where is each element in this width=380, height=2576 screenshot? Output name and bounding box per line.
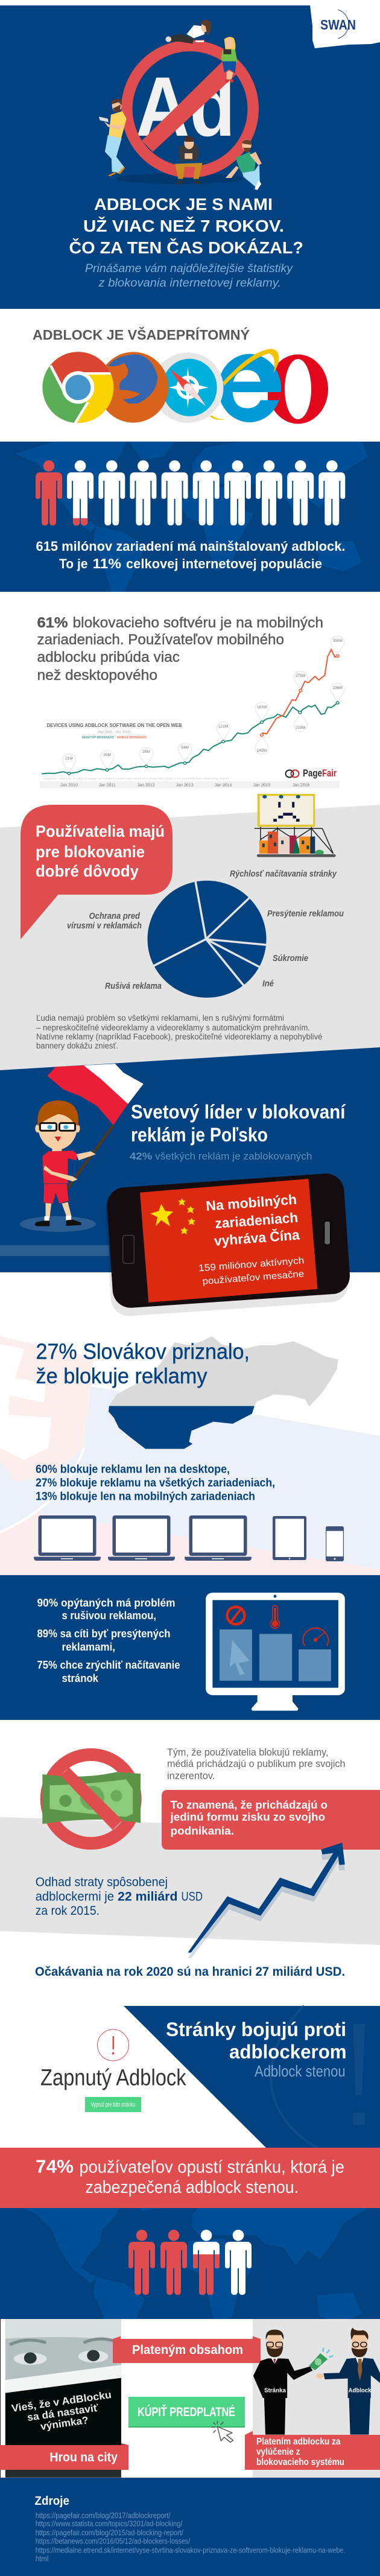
SWAN logo on torn paper: SWAN xyxy=(320,17,356,33)
label: paying adblock: Platením adblocku za xyxy=(256,2437,341,2447)
illustration: paying businessmen xyxy=(253,2327,380,2435)
panel: Poland xyxy=(0,1047,380,1272)
pin labels: 145M xyxy=(257,749,267,753)
walls subheading: Adblock stenou xyxy=(255,2062,346,2080)
billboard with sad face xyxy=(255,794,335,857)
label: paid content: Plateným obsahom xyxy=(132,2343,243,2357)
Slovakia heading: 27% Slovákov priznalo, xyxy=(36,1339,250,1364)
text: estimated loss: 22 miliárd xyxy=(118,1890,177,1904)
text: estimated loss: za rok 2015. xyxy=(36,1904,100,1918)
pie labels: Iné xyxy=(262,979,274,989)
callout: lost revenue: podnikania. xyxy=(170,1825,234,1837)
icon: gauge xyxy=(303,1628,328,1646)
Poland statistic: 42% xyxy=(130,1151,153,1162)
icon: laptop xyxy=(34,1515,101,1561)
device shares xyxy=(36,1464,275,1503)
speech bubble heading: dobré dôvody xyxy=(36,862,139,880)
chart legend: MOBILE BROWSERS xyxy=(117,736,147,740)
text: estimated loss: Odhad straty spôsobenej xyxy=(36,1876,168,1889)
band: 74 percent leave: používateľov opustí stránku, ktorá je xyxy=(79,2158,344,2177)
axis labels: Jan 2013 xyxy=(176,783,194,788)
label: paying adblock: blokovacieho systému xyxy=(256,2457,344,2467)
annoyance statistics: 75% chce zrýchliť načítavanie xyxy=(37,1659,180,1671)
lying woman xyxy=(165,20,211,43)
chart footnote: PageFair's estimate of adblock usage on mobile browsers was updated in November 2016 in its revised Mobile Adblocking Report xyxy=(43,777,229,780)
phone text xyxy=(198,1191,305,1287)
icon: opera xyxy=(268,355,328,424)
label: emotional appeal xyxy=(0,2443,128,2470)
panel: annoyance xyxy=(0,1575,380,1720)
walls heading xyxy=(166,2019,347,2063)
pin labels: 236M xyxy=(333,686,343,690)
phone: China statistic xyxy=(104,1172,351,1317)
man with yellow shirt xyxy=(99,99,127,176)
hero panel xyxy=(0,5,380,309)
phone text: vyhráva Čína xyxy=(214,1226,300,1249)
device shares: 27% blokuje reklamu na všetkých zariadeniach, xyxy=(36,1477,275,1489)
panel: adblock population xyxy=(0,442,380,592)
PageFair logo: Fair xyxy=(322,767,337,779)
seated man with phone xyxy=(175,136,203,185)
text: estimated loss: USD xyxy=(181,1890,203,1904)
icon: warning circle xyxy=(98,2029,129,2061)
icon: thermometer xyxy=(271,1606,280,1628)
pin labels xyxy=(65,639,343,761)
line chart xyxy=(40,636,344,788)
icon: banknote crossed out xyxy=(42,1754,141,1844)
sources list: https://pagefair.com/blog/2017/adblockreport/ xyxy=(36,2511,171,2520)
annoyance statistics: 90% opýtaných má problém xyxy=(37,1597,175,1609)
people pictogram xyxy=(36,460,345,525)
axis labels: Jan 2015 xyxy=(253,783,271,788)
text: mobile share: adblocku pribúda viac xyxy=(37,649,180,665)
pin labels: 275M xyxy=(296,674,305,678)
browser logos xyxy=(42,349,328,425)
icon: cursor click xyxy=(211,2421,233,2442)
text: mobile share: než desktopového xyxy=(37,667,157,684)
icon: tablet xyxy=(273,1516,306,1560)
text: estimated loss xyxy=(36,1876,203,1918)
text: mobile share: zariadeniach. Používateľov mobilného xyxy=(37,632,284,648)
desktop line xyxy=(42,703,338,774)
title: ČO ZA TEN ČAS DOKÁZAL? xyxy=(69,238,303,257)
panel: sources xyxy=(0,2478,380,2576)
boy with Polish flag xyxy=(34,1064,144,1226)
population text: celkovej internetovej populácie xyxy=(126,556,322,571)
sitting man in green shirt xyxy=(226,139,262,190)
phone text: zariadeniach xyxy=(214,1210,299,1231)
axis labels: Jan 2016 xyxy=(293,783,310,788)
button: disable adblock xyxy=(85,2097,141,2112)
pin labels: 121M xyxy=(218,725,228,729)
text: estimated loss: adblockermi je xyxy=(36,1890,114,1904)
title xyxy=(69,195,303,257)
paragraph: reasons: Natívne reklamy (napríklad Facebook), preskočiteľné videoreklamy a nepohyblivé xyxy=(36,1032,322,1041)
axis band xyxy=(40,781,339,788)
chart legend: DESKTOP BROWSERS xyxy=(82,736,114,740)
annoyance statistics: reklamami, xyxy=(62,1641,115,1653)
phone text: 159 miliónov aktívnych xyxy=(198,1255,305,1274)
annoyance statistics: stránok xyxy=(62,1672,99,1684)
speech bubble heading xyxy=(21,805,173,939)
icon: prohibited xyxy=(227,1607,244,1624)
chart title: DEVICES USING ADBLOCK SOFTWARE ON THE OPEN WEB xyxy=(47,722,182,728)
arrow: rising loss xyxy=(188,1842,345,1958)
axis labels: Jan 2014 xyxy=(215,783,232,788)
PageFair logo xyxy=(286,767,337,779)
paragraph: reasons: bannery dokážu zniesť. xyxy=(36,1041,118,1050)
button: disable adblock: Vypnúť pre túto stránku xyxy=(91,2101,135,2108)
population text: To je xyxy=(59,556,88,571)
pie chart xyxy=(147,875,271,998)
axis labels: Jan 2010 xyxy=(60,783,78,788)
icon: laptop xyxy=(108,1515,175,1561)
subtitle: z blokovania internetovej reklamy. xyxy=(98,277,281,290)
Poland heading: Svetový líder v blokovaní xyxy=(131,1101,346,1123)
paragraph: reasons: – nepreskočiteľné videoreklamy a videoreklamy s automatickým prehrávaním. xyxy=(36,1023,310,1032)
text: mobile share: 61% xyxy=(37,615,68,631)
pie labels: Presýtenie reklamou xyxy=(267,909,344,919)
pin labels: 390M xyxy=(333,639,343,643)
speech bubble heading: Používatelia majú xyxy=(36,822,165,840)
text: lost audience xyxy=(167,1746,345,1781)
panel: ways to fight xyxy=(0,2319,380,2481)
icon: internet explorer xyxy=(210,349,282,422)
pie labels: Rýchlosť načítavania stránky xyxy=(230,869,337,879)
panel: reasons xyxy=(0,794,380,1070)
pin labels: 54M xyxy=(181,746,189,750)
Slovakia heading: že blokuje reklamy xyxy=(36,1363,207,1388)
axis labels: Jan 2012 xyxy=(138,783,155,788)
callout: lost revenue xyxy=(162,1790,380,1850)
icon: chrome xyxy=(42,352,115,425)
book text: sa dá nastaviť xyxy=(27,2402,100,2423)
annoyance statistics: s rušivou reklamou, xyxy=(62,1610,156,1622)
panel: revenue loss xyxy=(0,1746,380,1979)
walls heading: Stránky bojujú proti xyxy=(166,2019,346,2040)
label: emotional appeal: Hrou na city xyxy=(49,2451,118,2464)
illustration: ad prohibition sign with people: Ad xyxy=(136,59,235,154)
label: paying adblock xyxy=(245,2431,380,2470)
pin labels: 216M xyxy=(296,726,305,730)
monitor with bars xyxy=(206,1593,345,1711)
sources list: https://www.statista.com/topics/3201/ad-blocking/ xyxy=(36,2519,183,2528)
text: 2020 expectation: Očakávania na rok 2020 sú na hranici 27 miliárd USD. xyxy=(35,1965,345,1979)
population text: 11% xyxy=(93,556,121,571)
pie labels: Súkromie xyxy=(273,954,308,963)
paragraph: reasons xyxy=(36,1014,322,1050)
sources heading: Zdroje xyxy=(35,2495,69,2508)
icon: cursor xyxy=(230,1640,250,1675)
population text: 615 milónov zariadení má nainštalovaný adblock. xyxy=(36,539,345,554)
annoyance statistics xyxy=(37,1597,180,1684)
band: 74 percent leave: 74% xyxy=(36,2156,74,2177)
sources list: https://pagefair.com/blog/2015/ad-blocking-report/ xyxy=(36,2528,183,2537)
illustration: ad prohibition sign with people xyxy=(99,20,262,190)
panel: Slovakia xyxy=(0,1336,380,1575)
sources list xyxy=(36,2511,345,2563)
annoyance statistics: 89% sa cíti byť presýtených xyxy=(37,1628,170,1640)
man: site xyxy=(253,2330,312,2435)
axis labels xyxy=(60,783,310,788)
book text: výnimka? xyxy=(40,2414,89,2432)
text: mobile share xyxy=(37,615,323,684)
subtitle xyxy=(85,262,294,290)
icon: firefox xyxy=(98,352,168,423)
title: UŽ VIAC NEŽ 7 ROKOV. xyxy=(83,217,284,235)
Slovakia heading xyxy=(36,1339,250,1388)
band: 74 percent leave: zabezpečená adblock stenou. xyxy=(86,2178,299,2197)
panel: adblock walls xyxy=(40,2006,380,2148)
pie labels: Ochrana pred xyxy=(89,912,141,921)
chart subtitle: (Apr 2009 - Dec 2016) xyxy=(98,731,131,734)
text: lost audience: inzerentov. xyxy=(167,1770,215,1781)
SWAN logo on torn paper xyxy=(310,5,380,48)
icon: Chinese flag stars xyxy=(150,1198,195,1234)
icon: phone xyxy=(326,1526,344,1561)
band: 74 percent leave xyxy=(0,2148,380,2208)
map of Slovakia xyxy=(109,1336,338,1449)
walls heading: adblockerom xyxy=(229,2041,347,2063)
callout: lost revenue: jedinú formu zisku zo svojho xyxy=(169,1811,325,1823)
heading: adblock everywhere: ADBLOCK JE VŠADEPRÍTOMNÝ xyxy=(33,326,250,343)
icon: safari xyxy=(152,352,223,423)
pin labels: 35M xyxy=(142,750,150,754)
sources list: html xyxy=(36,2554,48,2563)
text: lost audience: médiá prichádzajú o publikum pre svojich xyxy=(167,1758,345,1769)
book text: Vieš, že v AdBlocku xyxy=(11,2389,112,2414)
Poland statistic: všetkých reklám je zablokovaných xyxy=(155,1151,312,1162)
label: paid content xyxy=(113,2336,261,2363)
mobile line xyxy=(262,650,338,735)
label: paying adblock: vylúčenie z xyxy=(256,2447,300,2457)
pin labels: 30M xyxy=(103,753,111,757)
Poland heading: reklám je Poľsko xyxy=(131,1124,268,1146)
phone text: používateľov mesačne xyxy=(202,1269,305,1287)
button: buy subscription xyxy=(128,2397,245,2428)
paragraph: reasons: Ľudia nemajú problém so všetkými reklamami, len s rušivými formátmi xyxy=(36,1014,284,1023)
label: adblock: Adblock xyxy=(349,2387,372,2394)
callout: lost revenue: To znamená, že prichádzajú o xyxy=(170,1799,328,1811)
pie labels xyxy=(67,869,344,991)
subtitle: Prinášame vám najdôležitejšie štatistiky xyxy=(85,262,294,275)
phone text: Na mobilných xyxy=(205,1191,297,1214)
axis labels: Jan 2011 xyxy=(98,783,116,788)
book text xyxy=(11,2389,112,2432)
pie labels: Rušivá reklama xyxy=(105,982,162,991)
label: site: Stránka xyxy=(264,2387,286,2394)
text: lost audience: Tým, že používatelia blokujú reklamy, xyxy=(167,1746,328,1758)
devices icons xyxy=(34,1515,344,1561)
sources list: https://betanews.com/2016/05/12/ad-blockers-losses/ xyxy=(36,2537,191,2546)
icon: laptop xyxy=(185,1515,252,1561)
man: adblock xyxy=(316,2327,380,2435)
chart legend xyxy=(82,736,147,740)
blonde woman with tablet xyxy=(221,37,238,83)
icon: money xyxy=(309,2348,333,2370)
speech bubble heading: pre blokovanie xyxy=(36,843,145,861)
pin labels: 181M xyxy=(257,705,267,709)
population text xyxy=(36,539,345,571)
photo: child with book xyxy=(5,2319,121,2481)
device shares: 13% blokuje len na mobilných zariadeniach xyxy=(36,1491,255,1503)
data pins xyxy=(62,636,344,773)
adblock wall message: Zapnutý Adblock xyxy=(40,2066,186,2091)
title: ADBLOCK JE S NAMI xyxy=(94,195,273,214)
pie labels: vírusmi v reklamách xyxy=(67,921,142,931)
PageFair logo: Page xyxy=(303,767,322,779)
Poland heading xyxy=(131,1101,346,1146)
panel: four people pictogram xyxy=(0,2208,380,2319)
pin labels: 21M xyxy=(65,757,73,761)
button: buy subscription: KÚPIŤ PREDPLATNÉ xyxy=(138,2405,235,2419)
text: mobile share: blokovacieho softvéru je na mobilných xyxy=(72,615,323,631)
device shares: 60% blokuje reklamu len na desktope, xyxy=(36,1464,230,1476)
